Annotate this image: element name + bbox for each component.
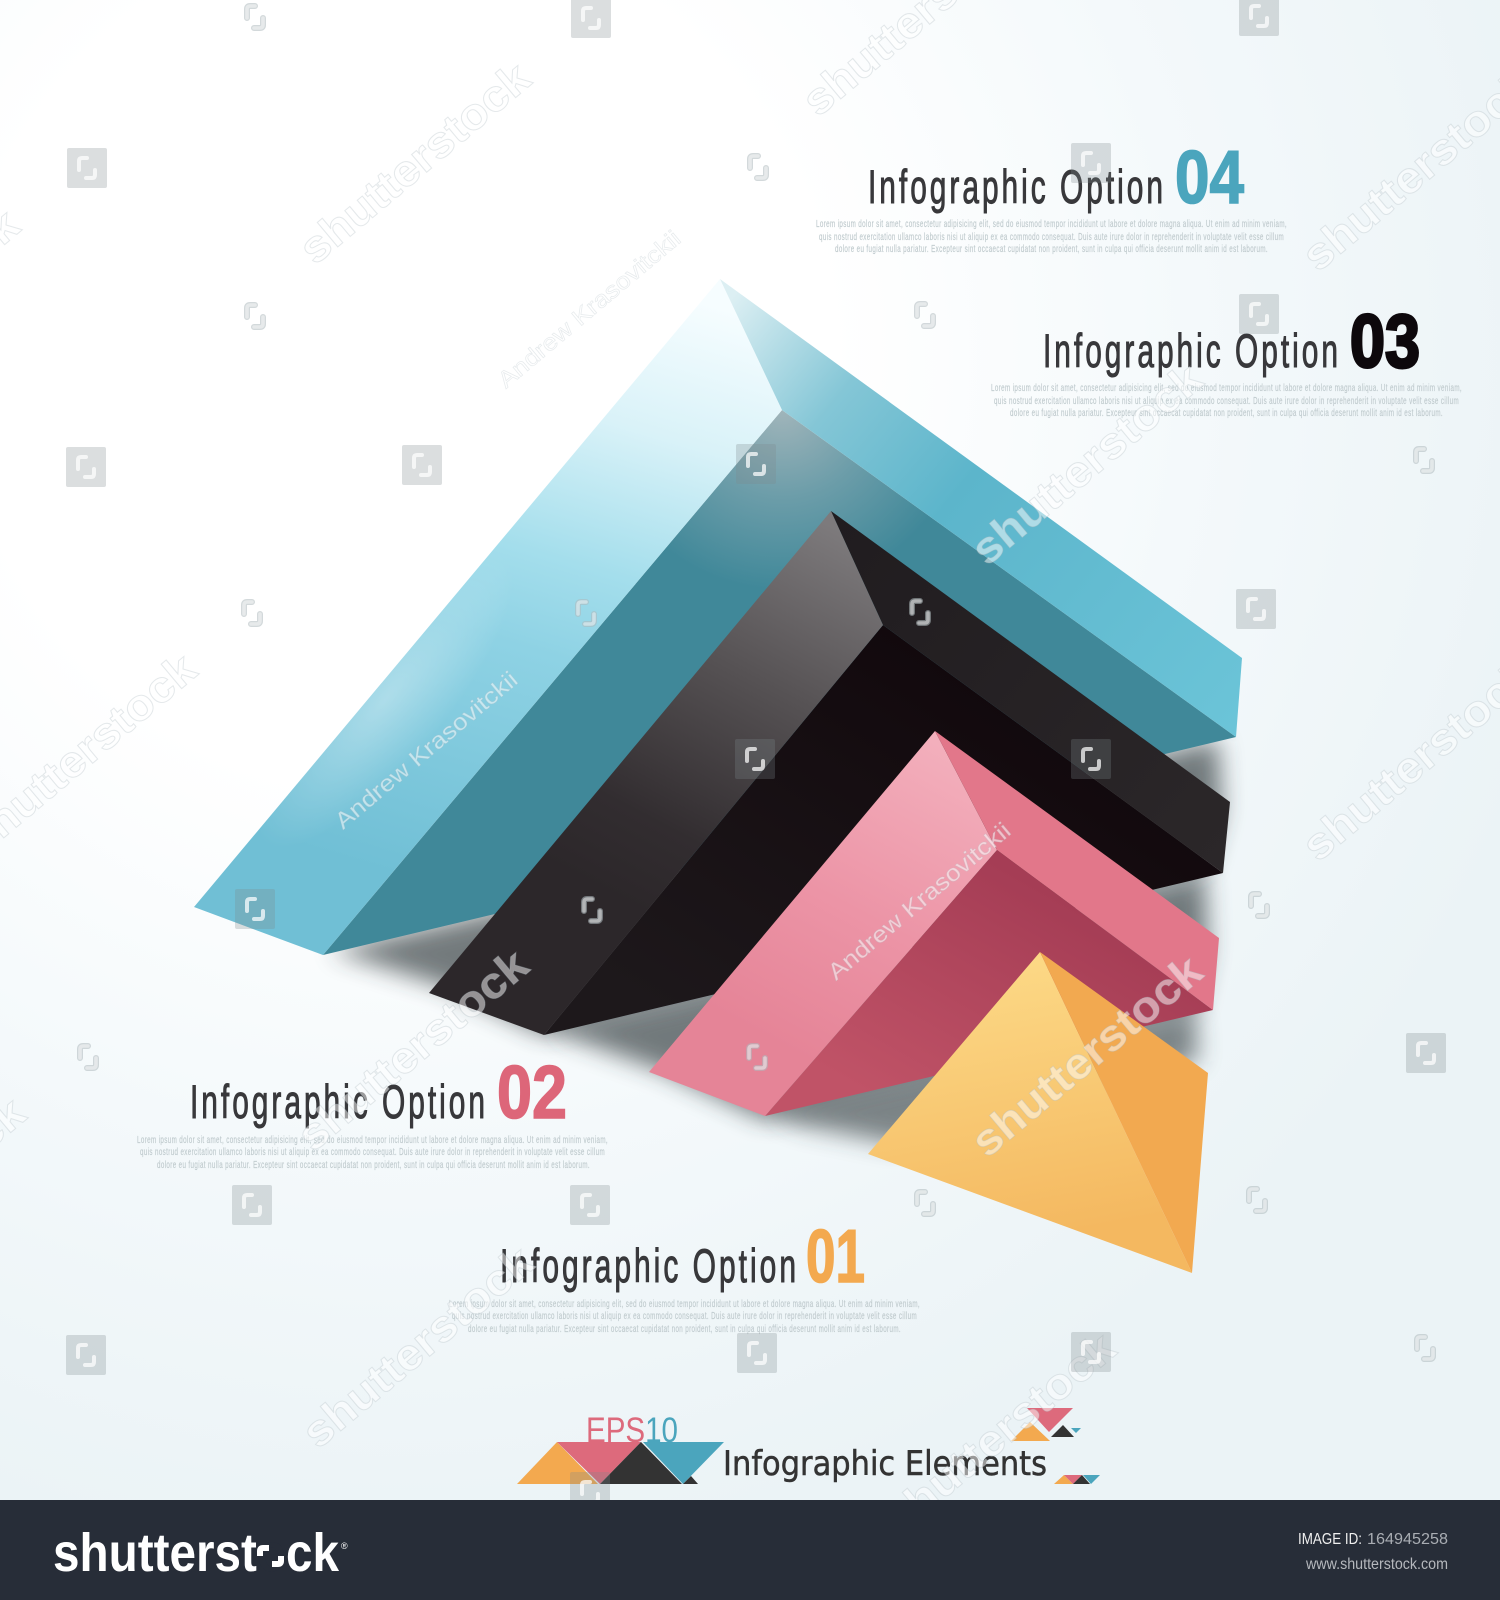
watermark text: shutterstock — [875, 1323, 1125, 1544]
description 01: dolore eu fugiat nulla pariatur. Excepteur sint occaecat cupidatat non proident, sunt in culpa qui officia deserunt mollit anim id est laborum. — [468, 1323, 901, 1335]
description 01 — [449, 1298, 920, 1335]
watermark text: shutterstock — [288, 940, 538, 1161]
pink underside — [765, 850, 1213, 1116]
footer background — [0, 1500, 1500, 1600]
website: www.shutterstock.com — [1305, 1556, 1448, 1573]
description 01: Lorem ipsum dolor sit amet, consectetur adipisicing elit, sed do eiusmod tempor incididunt ut labore et dolore magna aliqua. Ut enim ad minim veniam, — [449, 1298, 920, 1310]
image id label: IMAGE ID: — [1298, 1531, 1362, 1548]
option 02 — [137, 1050, 608, 1171]
black right face — [831, 511, 1230, 873]
black layer — [429, 511, 1230, 1035]
pink right face — [935, 731, 1219, 1010]
yellow left face — [868, 952, 1192, 1273]
image id number: 164945258 — [1367, 1531, 1448, 1548]
description 03 — [991, 382, 1462, 419]
teal left face highlight — [194, 279, 782, 955]
icon: small triangles lower — [1054, 1475, 1100, 1484]
pink left face — [649, 731, 997, 1116]
watermark text: shutterstock — [962, 354, 1212, 575]
shadow under teal layer — [330, 740, 1222, 1035]
watermark text: shutterstock — [290, 53, 540, 274]
description 01: quis nostrud exercitation ullamco laboris nisi ut aliquip ex ea commodo consequat. Duis aute irure dolor in reprehenderit in voluptate velit esse cillum — [452, 1310, 917, 1322]
teal underside — [323, 410, 1236, 955]
description 04 — [816, 218, 1287, 255]
option 04 — [816, 135, 1287, 255]
icon: small triangles upper — [1011, 1408, 1081, 1441]
pyramid diagram — [194, 279, 1242, 1273]
watermark text: shutterstock — [293, 1237, 543, 1458]
registered mark: ® — [341, 1541, 348, 1551]
icon: large triangles — [517, 1442, 724, 1484]
teal left face — [194, 279, 782, 955]
watermark text: Andrew Krasovitckii — [823, 817, 1015, 985]
watermark outline icons — [80, 6, 1433, 1359]
description 02: dolore eu fugiat nulla pariatur. Excepteur sint occaecat cupidatat non proident, sunt in culpa qui officia deserunt mollit anim id est laborum. — [157, 1159, 590, 1171]
pink layer — [649, 731, 1219, 1116]
description 02: Lorem ipsum dolor sit amet, consectetur adipisicing elit, sed do eiusmod tempor incididunt ut labore et dolore magna aliqua. Ut enim ad minim veniam, — [137, 1134, 608, 1146]
icon: logo bracket — [260, 1548, 281, 1564]
option 03 — [991, 299, 1462, 419]
shadow under pink layer — [770, 1012, 1198, 1145]
number 04: 04 — [1175, 135, 1244, 219]
tagline: Infographic Elements — [723, 1444, 1047, 1484]
teal right face — [720, 279, 1242, 737]
black left face — [429, 511, 883, 1035]
heading 01: Infographic Option — [500, 1239, 799, 1292]
heading 02: Infographic Option — [190, 1075, 488, 1128]
watermark text: shutterstock — [962, 946, 1212, 1167]
number 01: 01 — [806, 1214, 865, 1298]
watermark text: Andrew Krasovitckii — [493, 225, 685, 393]
heading 04: Infographic Option — [868, 160, 1166, 213]
number 02: 02 — [497, 1050, 567, 1134]
black underside — [544, 625, 1223, 1035]
description 02 — [137, 1134, 608, 1171]
yellow pyramid — [868, 952, 1208, 1273]
heading 03: Infographic Option — [1043, 324, 1341, 377]
shadow under black layer — [550, 875, 1208, 1120]
number 03: 03 — [1350, 299, 1420, 383]
EPS10 label: EPS10 — [586, 1411, 678, 1450]
yellow right face — [1040, 952, 1208, 1273]
watermark text: Andrew Krasovitckii — [330, 666, 522, 834]
footer logo: shutterstock — [53, 1523, 340, 1583]
option 01 — [449, 1214, 920, 1335]
description 02: quis nostrud exercitation ullamco laboris nisi ut aliquip ex ea commodo consequat. Duis aute irure dolor in reprehenderit in voluptate velit esse cillum — [140, 1146, 605, 1158]
teal layer — [194, 279, 1242, 955]
logo block: infographic elements — [517, 1408, 1100, 1484]
footer bar — [0, 1500, 1500, 1600]
